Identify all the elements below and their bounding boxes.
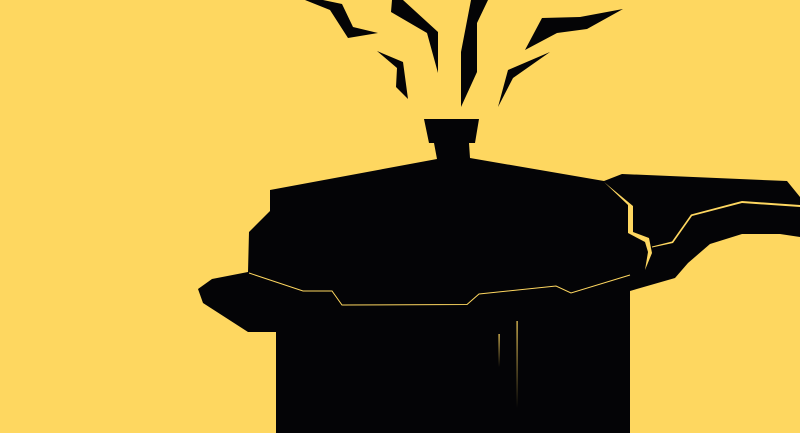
crack: lid to handle joint	[604, 182, 652, 270]
steam: far right	[525, 9, 623, 50]
steam: lower right	[498, 52, 550, 107]
steam: lower left	[377, 51, 408, 99]
crack: right handle	[652, 201, 800, 248]
crack: body short line	[498, 334, 500, 367]
steam: far left	[305, 0, 378, 38]
crack: body long line	[516, 321, 518, 408]
cooker silhouette: valve, lid, body and handles	[198, 119, 800, 433]
cracks	[249, 182, 800, 408]
crack: lid rim	[249, 273, 630, 305]
steam bursts	[305, 0, 623, 107]
steam: centre left	[391, 0, 438, 73]
steam: centre	[461, 0, 488, 107]
